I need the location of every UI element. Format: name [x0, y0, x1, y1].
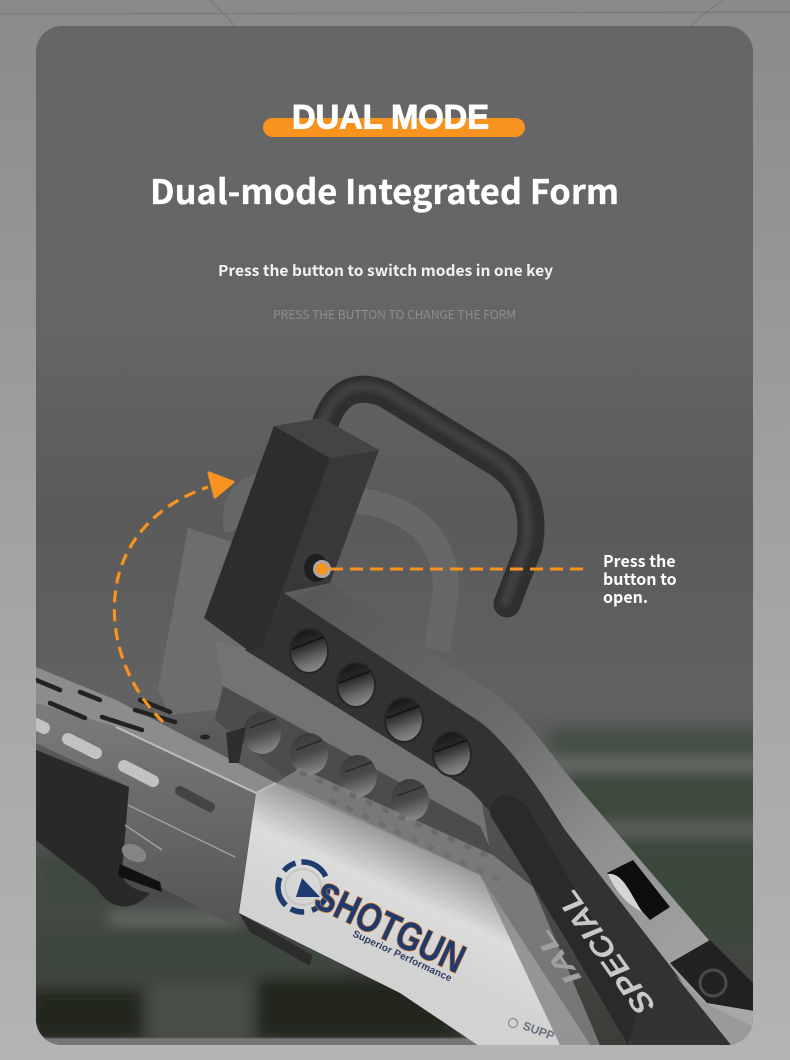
ghost arm	[215, 686, 490, 850]
blurred green background	[30, 728, 770, 1040]
lower gun strip	[239, 913, 312, 966]
subtitle: Press the button to switch modes in one key	[218, 260, 553, 281]
light side band of arm	[463, 700, 753, 1045]
gun white body	[239, 783, 600, 1060]
block front face	[204, 426, 330, 651]
ghost arm backing	[258, 678, 490, 846]
slot in arm	[607, 860, 670, 920]
title: Dual-mode Integrated Form	[150, 165, 619, 214]
lower latch opening	[670, 940, 753, 1044]
dark arm	[245, 593, 735, 1050]
handle	[320, 386, 531, 604]
support label: SUPP	[521, 1019, 556, 1043]
button marker	[304, 554, 331, 582]
orange pill	[263, 118, 525, 137]
arrow: rotation arc	[114, 473, 233, 722]
callout line	[330, 568, 590, 570]
callout text: button to	[603, 566, 677, 590]
support label	[508, 1018, 554, 1038]
ghost handle	[236, 485, 446, 650]
translucent rail with ridges	[276, 768, 600, 1045]
ghost special label: IAL	[529, 924, 587, 990]
caption: PRESS THE BUTTON TO CHANGE THE FORM	[273, 306, 516, 323]
logo: shotgun mark	[278, 862, 328, 912]
arm recess	[490, 795, 640, 1045]
callout text: Press the	[603, 548, 676, 572]
special label: SPECIAL	[552, 883, 662, 1021]
arm holes	[290, 629, 471, 776]
block top face	[274, 418, 379, 458]
ghost plate	[158, 528, 245, 715]
block side face	[279, 450, 379, 600]
logo tagline: Superior Performance	[351, 929, 454, 985]
sight post	[191, 727, 246, 763]
logo text: SHOTGUN	[308, 874, 472, 982]
callout text: open.	[603, 584, 648, 608]
badge: dual mode: DUAL MODE	[292, 98, 489, 136]
gun metal details	[118, 805, 235, 892]
gun front metal body	[36, 703, 256, 927]
gun top rail	[36, 667, 276, 807]
dark grip	[36, 750, 150, 906]
